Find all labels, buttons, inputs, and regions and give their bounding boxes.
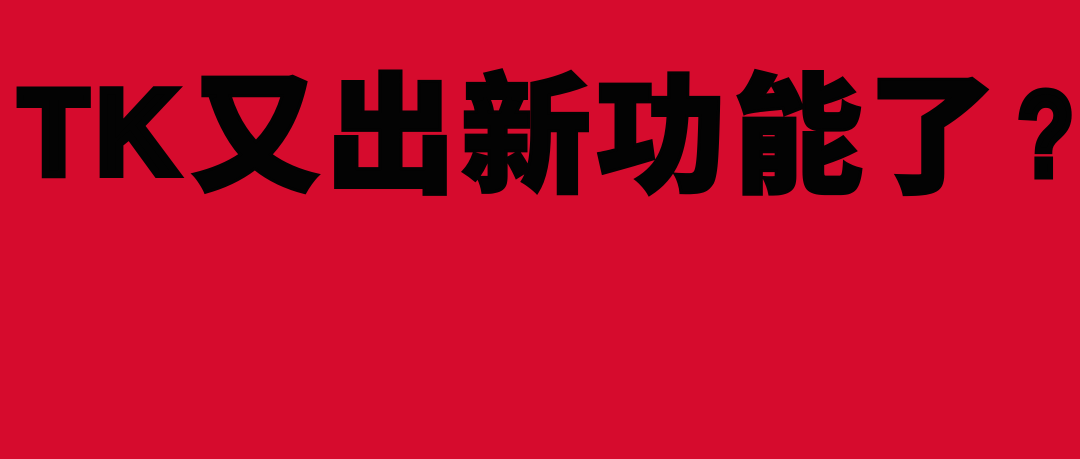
title: 功 xyxy=(596,64,726,210)
title: 新 xyxy=(461,64,591,210)
title: 又 xyxy=(190,64,320,210)
title: ? xyxy=(1017,66,1074,202)
title: 了 xyxy=(867,64,997,210)
title: TK xyxy=(19,64,185,200)
title: 能 xyxy=(733,64,863,210)
title xyxy=(16,64,1074,210)
title: 出 xyxy=(326,64,456,210)
